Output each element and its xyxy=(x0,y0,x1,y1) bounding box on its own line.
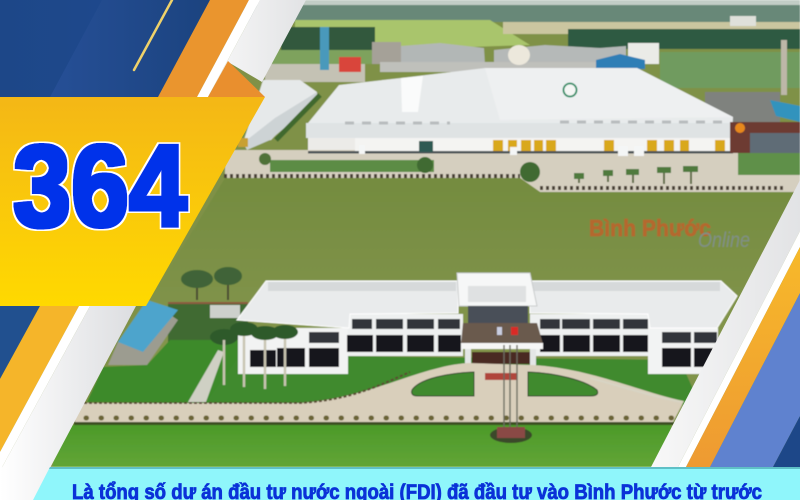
hedge and front lawn xyxy=(53,418,674,467)
orange triangle xyxy=(208,61,265,97)
field trees xyxy=(181,267,242,300)
blue roof shed xyxy=(108,300,178,365)
flagpoles xyxy=(504,345,517,427)
entrance steps xyxy=(485,373,517,380)
watermark: Binh Phuoc Online: Online xyxy=(698,229,750,252)
driveway island right xyxy=(528,372,598,396)
roof left wing xyxy=(237,281,458,328)
chimney xyxy=(781,40,787,95)
fountain base xyxy=(490,427,532,443)
watermark: Binh Phuoc Online: Bình Phước xyxy=(589,215,711,241)
loading dock doors xyxy=(493,140,725,151)
driveway island left xyxy=(412,372,474,396)
yellow accent line xyxy=(134,0,172,70)
office building xyxy=(237,273,737,377)
left white warehouse xyxy=(238,80,320,150)
pavement area xyxy=(224,150,800,192)
top white stripe xyxy=(197,0,260,97)
main grass field xyxy=(100,178,800,460)
central tower xyxy=(457,273,537,306)
main factory building xyxy=(306,68,733,156)
top left navy panel xyxy=(0,0,210,97)
windows xyxy=(309,319,717,343)
red tank xyxy=(339,57,361,72)
front lawn of office xyxy=(205,355,700,405)
bottom left white stripe xyxy=(0,306,90,471)
water tower xyxy=(320,27,329,70)
company logo on roof xyxy=(564,84,576,96)
right blue stripe xyxy=(710,293,800,467)
red boundary and small garden behind office xyxy=(168,302,248,344)
top orange stripe xyxy=(158,0,249,97)
big number 364: 364 xyxy=(13,121,187,251)
back buildings row xyxy=(372,42,659,72)
facade xyxy=(238,328,348,374)
bottom left navy stripe xyxy=(0,306,40,379)
flags xyxy=(511,327,518,335)
bottom left gray stripe xyxy=(0,306,136,500)
right navy corner xyxy=(773,416,800,467)
brown side building xyxy=(730,122,800,153)
top gray stripe xyxy=(208,0,306,97)
caption band xyxy=(33,467,800,500)
balcony and porch xyxy=(461,323,543,344)
curved driveway xyxy=(75,363,684,424)
right gray stripe xyxy=(651,180,800,467)
palm trees xyxy=(210,322,298,389)
trucks xyxy=(359,145,644,156)
right orange stripe xyxy=(686,247,800,467)
garden path xyxy=(188,350,224,402)
watermark: Binh Phuoc Online xyxy=(589,215,750,252)
bottom left orange stripe xyxy=(0,306,79,452)
roof right wing xyxy=(530,281,737,328)
right side plant and blue roofs xyxy=(705,92,800,122)
right white stripe xyxy=(678,231,800,467)
left lawn xyxy=(87,340,240,404)
yellow number panel xyxy=(0,97,265,306)
distant background: haze, fields and treelines xyxy=(230,0,800,88)
